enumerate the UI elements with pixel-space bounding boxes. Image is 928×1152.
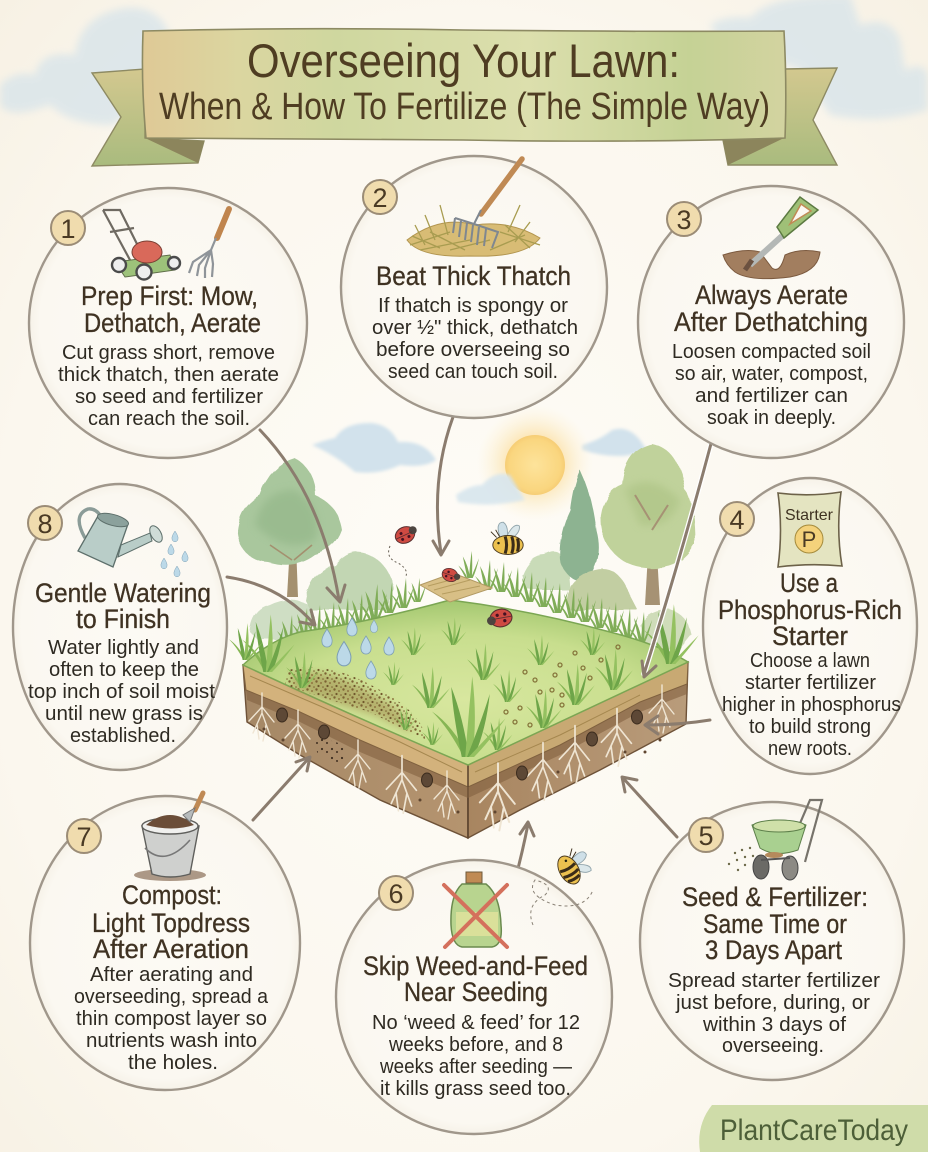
body 5: just before, during, or <box>675 991 870 1014</box>
body 8: top inch of soil moist <box>28 680 215 703</box>
heading 7: Light Topdress <box>92 908 250 938</box>
circle 6 <box>336 860 612 1134</box>
arrow 8 <box>227 577 315 625</box>
panel 7: compost <box>30 793 300 1090</box>
title banner <box>92 29 837 166</box>
body 7: nutrients wash into <box>86 1029 257 1052</box>
soil block <box>243 662 688 838</box>
circle 4 <box>703 478 917 774</box>
fertilizer seeds <box>504 645 620 727</box>
right ribbon tail <box>723 68 837 165</box>
bush right <box>566 569 638 610</box>
badge 6: 6 <box>388 879 404 909</box>
panel 5: seed and fertilizer <box>640 800 904 1080</box>
badge 1: 1 <box>60 214 76 244</box>
body 3: Loosen compacted soil <box>672 340 871 363</box>
left ribbon tail <box>92 69 204 166</box>
central lawn scene <box>229 405 699 838</box>
icon: lawn mower <box>103 210 180 280</box>
arrow 2 <box>433 417 453 555</box>
body 8: established. <box>70 724 176 747</box>
body 3 <box>672 340 871 429</box>
body 3: and fertilizer can <box>695 384 848 407</box>
panel 4: phosphorus starter <box>703 478 917 774</box>
thatch layer <box>243 662 688 787</box>
heading 1: Dethatch, Aerate <box>84 308 261 338</box>
body 5: Spread starter fertilizer <box>668 969 880 992</box>
arrow 6 <box>515 822 534 880</box>
bee in scene <box>491 522 523 554</box>
compost patch <box>285 668 425 740</box>
soil specks <box>262 728 662 814</box>
heading 6: Near Seeding <box>404 977 548 1007</box>
arrow 4 <box>645 716 710 734</box>
circle 7 <box>30 796 300 1090</box>
roots <box>249 685 674 830</box>
arrow 1 <box>260 430 345 602</box>
left soil face <box>243 665 468 838</box>
arrows <box>227 417 712 880</box>
body 1 <box>58 341 279 430</box>
subtitle text: When & How To Fertilize (The Simple Way) <box>159 86 770 128</box>
badge 3: 3 <box>676 205 692 235</box>
heading 3 <box>674 280 868 337</box>
heading 7: Compost: <box>122 880 222 910</box>
body 6: No ‘weed & feed’ for 12 <box>372 1011 580 1034</box>
right soil face <box>468 662 688 838</box>
circle 2 <box>341 156 607 418</box>
bushes right <box>522 552 570 590</box>
heading 1 <box>81 281 261 338</box>
badge 3 <box>667 202 701 236</box>
sun <box>477 405 593 521</box>
body 8: until new grass is <box>45 702 203 725</box>
body 7: the holes. <box>128 1051 218 1074</box>
icon: compost bucket <box>134 793 206 881</box>
badge 8: 8 <box>37 509 53 539</box>
body 1: thick thatch, then aerate <box>58 363 279 386</box>
heading 7: After Aeration <box>93 934 249 964</box>
icon: starter bag: Starter <box>785 507 834 524</box>
badge 5 <box>689 818 723 852</box>
body 6: it kills grass seed too. <box>380 1077 571 1100</box>
body 7: After aerating and <box>90 963 253 986</box>
ladybug on grass <box>485 607 513 629</box>
badge 8 <box>28 506 62 540</box>
arrow 7 <box>253 757 310 820</box>
dark soil shade <box>246 684 687 798</box>
water drops on lawn <box>322 618 394 679</box>
bush left lower <box>250 600 315 640</box>
body 7 <box>74 963 269 1074</box>
panel 6: skip weed and feed <box>336 844 612 1134</box>
heading 1: Prep First: Mow, <box>81 281 258 311</box>
circle 8 <box>13 484 227 770</box>
icon: aerator tool in soil <box>723 197 820 279</box>
body 8: often to keep the <box>49 658 199 681</box>
circle 1 <box>29 188 307 458</box>
icon: starter bag: P <box>802 527 816 552</box>
body 3: soak in deeply. <box>707 406 836 429</box>
body 5: overseeing. <box>722 1034 824 1057</box>
circle 5 <box>640 802 904 1080</box>
heading 3: After Dethatching <box>674 307 868 337</box>
banner panel <box>142 29 786 141</box>
body 7: thin compost layer so <box>76 1007 267 1030</box>
body 2 <box>372 294 578 383</box>
heading 5: 3 Days Apart <box>705 935 843 965</box>
heading 2: Beat Thick Thatch <box>376 261 571 291</box>
arrow 3 line <box>642 440 712 677</box>
icon: watering can <box>78 509 188 577</box>
panel 1: prep first <box>29 188 307 458</box>
clouds in scene <box>312 423 647 473</box>
tree left <box>237 458 342 597</box>
body 2: before overseeing so <box>376 338 570 361</box>
icon: starter bag <box>778 492 842 567</box>
body 8 <box>28 636 215 747</box>
body 2: seed can touch soil. <box>388 360 558 383</box>
heading 4: Use a <box>780 568 838 598</box>
brand tag: PlantCareToday <box>720 1114 908 1147</box>
body 4: starter fertilizer <box>745 671 876 694</box>
arrow 3 halo <box>644 440 712 674</box>
body 1: so seed and fertilizer <box>75 385 263 408</box>
circle 3 <box>638 186 904 458</box>
body 6: weeks before, and 8 <box>388 1033 563 1056</box>
body 4: Choose a lawn <box>750 649 870 672</box>
brand tag <box>699 1105 928 1152</box>
panel 8: gentle watering <box>13 484 227 770</box>
tree right <box>601 444 695 605</box>
body 1: can reach the soil. <box>88 407 250 430</box>
body 3: so air, water, compost, <box>675 362 868 385</box>
heading 4 <box>718 568 902 651</box>
badge 4: 4 <box>729 505 745 535</box>
ladybug on hay <box>440 566 462 585</box>
badge 1 <box>51 211 85 245</box>
body 5: within 3 days of <box>702 1013 846 1036</box>
ladybug flying <box>389 522 420 578</box>
heading 8: to Finish <box>76 604 170 634</box>
body 1: Cut grass short, remove <box>62 341 275 364</box>
icon: garden fork <box>189 209 229 278</box>
body 4: new roots. <box>768 737 852 760</box>
body 4 <box>722 649 901 760</box>
heading 7 <box>92 880 250 964</box>
badge 2: 2 <box>372 183 388 213</box>
body 2: If thatch is spongy or <box>378 294 568 317</box>
icon: crossed-out bottle <box>444 872 507 947</box>
body 7: overseeding, spread a <box>74 985 269 1008</box>
bush left <box>305 552 394 610</box>
badge 7 <box>67 819 101 853</box>
cypress <box>560 470 598 582</box>
body 6 <box>372 1011 580 1100</box>
badge 6 <box>379 876 413 910</box>
sky clouds behind banner <box>0 0 928 125</box>
body 6: weeks after seeding — <box>379 1055 572 1078</box>
heading 6 <box>363 951 588 1007</box>
bush far right <box>640 610 692 650</box>
badge 5: 5 <box>698 821 714 851</box>
panel 2: beat thick thatch <box>341 156 607 418</box>
cloud over sun <box>456 474 525 505</box>
heading 8: Gentle Watering <box>35 578 211 608</box>
heading 5: Seed & Fertilizer: <box>682 882 868 912</box>
body 2: over ½" thick, dethatch <box>372 316 578 339</box>
heading 4: Starter <box>772 621 848 651</box>
panel 3: always aerate <box>638 186 904 458</box>
body 4: to build strong <box>749 715 871 738</box>
heading 6: Skip Weed-and-Feed <box>363 951 588 981</box>
icon: spreader <box>728 800 822 880</box>
back grass fringe <box>277 551 652 645</box>
badge 2 <box>363 180 397 214</box>
body 8: Water lightly and <box>48 636 199 659</box>
badge 4 <box>720 502 754 536</box>
icon: bee with dashed trail <box>531 844 596 925</box>
icon: rake in thatch <box>407 159 540 256</box>
heading 3: Always Aerate <box>695 280 848 310</box>
heading 5: Same Time or <box>703 909 847 939</box>
heading 5 <box>682 882 868 965</box>
badge 7: 7 <box>76 822 92 852</box>
seed holes <box>276 708 642 787</box>
grass tufts <box>229 604 699 757</box>
hay patch <box>420 573 492 602</box>
heading 8 <box>35 578 211 634</box>
body 4: higher in phosphorus <box>722 693 901 716</box>
heading 4: Phosphorus-Rich <box>718 595 902 625</box>
body 5 <box>668 969 880 1057</box>
arrow 5 <box>622 777 677 837</box>
lawn top <box>243 600 688 765</box>
title text: Overseeing Your Lawn: <box>247 34 680 87</box>
